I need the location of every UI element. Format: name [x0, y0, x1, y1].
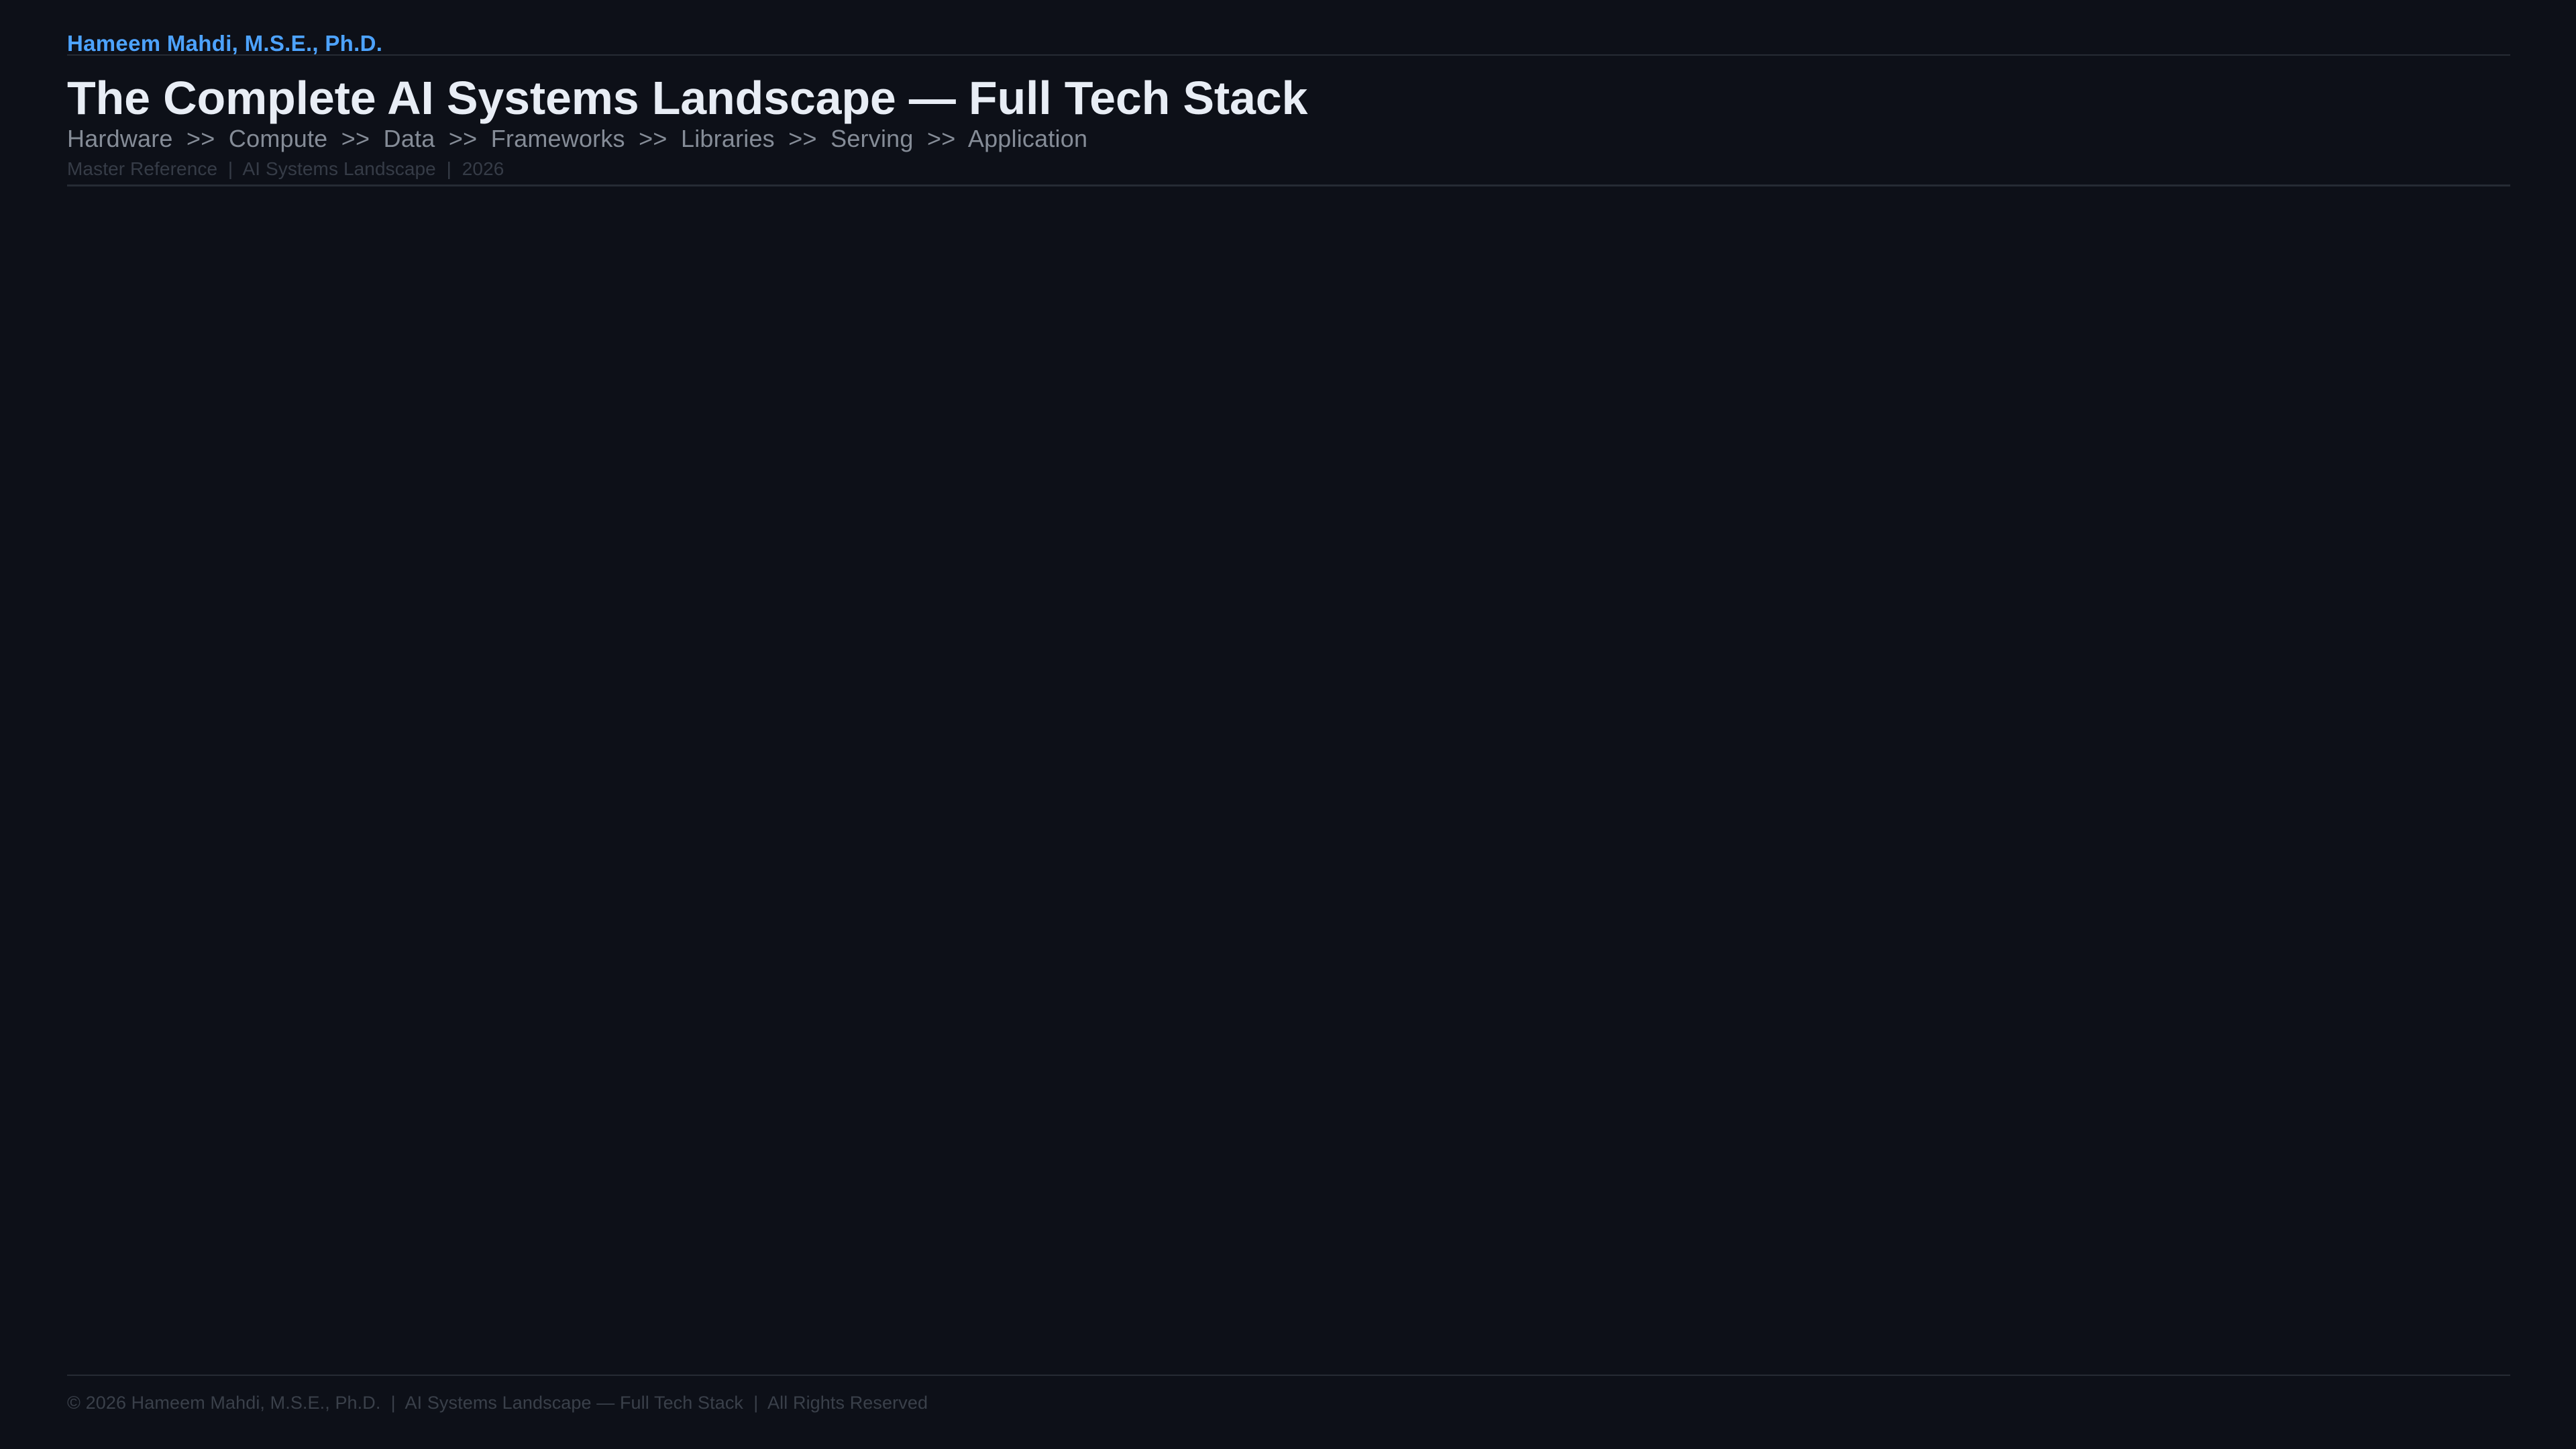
- footer: © 2026 Hameem Mahdi, M.S.E., Ph.D. | AI Systems Landscape — Full Tech Stack | All Rights Reserved: [67, 1393, 928, 1413]
- title: The Complete AI Systems Landscape — Full Tech Stack: [67, 72, 1307, 124]
- author name: Hameem Mahdi, M.S.E., Ph.D.: [67, 31, 382, 56]
- reference tagline: Master Reference | AI Systems Landscape | 2026: [67, 158, 504, 179]
- stack breadcrumb subtitle: Hardware >> Compute >> Data >> Frameworks >> Libraries >> Serving >> Application: [67, 125, 1087, 152]
